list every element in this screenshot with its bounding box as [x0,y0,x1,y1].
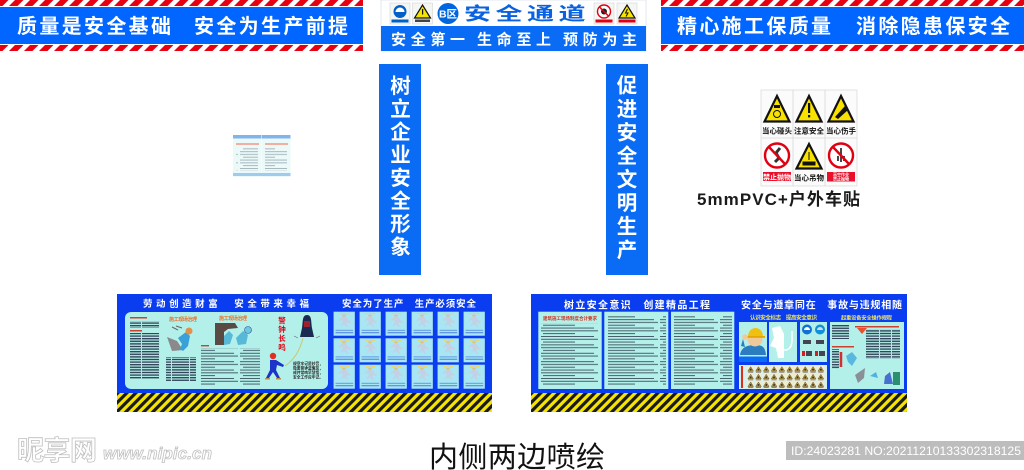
vertical banner: civil production: 安 [617,122,637,144]
banner: construction quality slogan (right): 精心施工保质量 [677,15,831,38]
icon: electric hazard sign [617,3,637,24]
panel: rules column one: 建筑施工现场制度合计要求 [543,315,597,322]
hazard stripe [117,393,492,412]
label: orange caption one: 施工现场治理 [169,316,197,323]
vertical banner: corporate safety image: 树 [390,75,411,98]
label: alarm bell long rings: 警 [278,315,286,325]
icon: falling worker [167,326,192,351]
banner: quality and safety slogan (left): 质量是安全基础 [17,14,171,38]
text: bell verse: 规章牢记是妙音， [293,361,323,366]
vertical banner: corporate safety image [379,64,421,275]
vertical banner: corporate safety image: 安 [390,167,411,190]
icon: caution triangle sign [412,3,432,24]
sign: watch your head: 当心碰头 [762,126,792,136]
label: alarm bell long rings: 长 [278,333,286,343]
icon: wear helmet sign [390,3,410,24]
watermark: image ID strip: ID:24023281 NO:20211210133302318125 [791,444,1021,458]
grid: safety rule cards [334,312,485,389]
slogan strip: 生命至上 [477,30,551,48]
icon: worker pulling bell rope [265,353,284,380]
sign: watch your hands: 当心伤手 [826,126,856,136]
brochure thumbnail [233,135,290,177]
text: bell verse: 戒并常鸣早慧悟， [293,370,323,375]
panel: right inner spray-painting board [531,294,907,412]
icon: prohibition sign [594,3,614,24]
vertical banner: civil production: 全 [617,144,638,168]
label: alarm bell long rings: 鸣 [278,342,286,352]
label: orange caption two: 施工现场治理 [219,315,247,322]
sign: no working without protection [827,144,855,182]
vertical banner: corporate safety image: 全 [390,189,411,213]
watermark: nipic logo: www.nipic.cn [103,444,212,463]
text: bell verse [293,361,323,380]
icon: alarm bell [285,315,320,366]
panel: lifting equipment operating rules [830,322,904,389]
watermark: image ID strip [786,441,1024,460]
safety signs group [761,90,857,186]
sign: safety passage header [381,0,646,51]
banner: construction quality slogan (right): 消除隐患保安全 [856,14,1010,38]
banner: quality and safety slogan (left): 安全为生产前提 [194,14,348,38]
panel: rules column three [671,312,734,389]
banner: quality and safety slogan (left) [0,0,363,51]
vertical banner: civil production: 文 [617,168,638,192]
vertical banner: civil production [606,64,648,275]
panel: safety article [125,312,328,389]
watermark: nipic logo: 昵享网 [17,436,97,466]
vertical banner: civil production: 进 [617,98,637,121]
banner: construction quality slogan (right) [661,0,1024,51]
sign: watch for hoisted loads: 当心吊物 [794,172,824,182]
hazard stripe [531,393,907,412]
label: alarm bell long rings: 钟 [278,324,286,334]
sign: no throwing objects: 禁止抛物 [763,172,791,182]
sign: attention safety: 注意安全 [794,126,824,136]
panel: left inner spray-painting board [117,294,492,412]
icon: zone B badge: B区 [439,8,458,20]
icon: zone B badge [438,3,458,24]
sign: no working without protection: 高空作业 [833,171,849,177]
text: bell verse: 安全工作应牢记。 [293,374,323,380]
vertical banner: civil production: 促 [617,74,637,98]
panel: rules column two [604,312,668,389]
subheading: lifting equipment rules: 起重设备安全操作规程 [841,314,893,322]
caption: material spec: 5mmPVC+户外车贴 [697,189,860,209]
label: alarm bell long rings [278,315,286,352]
vertical banner: civil production: 明 [617,192,637,215]
heading: build safety awareness: 树立安全意识 创建精品工程 [564,298,710,312]
sign: no working without protection: 禁止抛物 [833,176,849,182]
heading: safety and violations: 安全与遵章同在 事故与违规相随 [741,298,902,312]
vertical banner: corporate safety image: 象 [390,235,411,259]
vertical banner: corporate safety image: 业 [390,144,411,167]
title: safety passage: 安全通道 [464,3,590,24]
slogan strip: 安全第一 [391,30,465,48]
panel: warning sign grid [739,365,827,389]
slogan strip [381,26,646,51]
text: bell verse: 隐患警钟莫懈怠， [293,366,323,370]
vertical banner: civil production: 产 [617,239,637,262]
watermark: nipic logo [17,436,212,466]
slogan strip: 预防为主 [563,30,637,48]
panel: worker with helmet [739,322,767,362]
vertical banner: civil production: 生 [617,216,637,238]
heading: safety for production: 安全为了生产 生产必须安全 [342,298,476,310]
icon: cave workers [215,323,252,345]
panel: safety belt [769,322,797,362]
heading: labor creates wealth: 劳动创造财富 安全带来幸福 [143,298,309,310]
vertical banner: corporate safety image: 企 [390,120,411,144]
vertical banner: corporate safety image: 形 [390,213,411,236]
panel: rules column one [538,312,602,389]
vertical banner: corporate safety image: 立 [390,97,411,121]
subheading: recognise safety signs: 认识安全标志 提高安全意识 [750,314,817,322]
panel: protective gear signs [800,322,827,362]
